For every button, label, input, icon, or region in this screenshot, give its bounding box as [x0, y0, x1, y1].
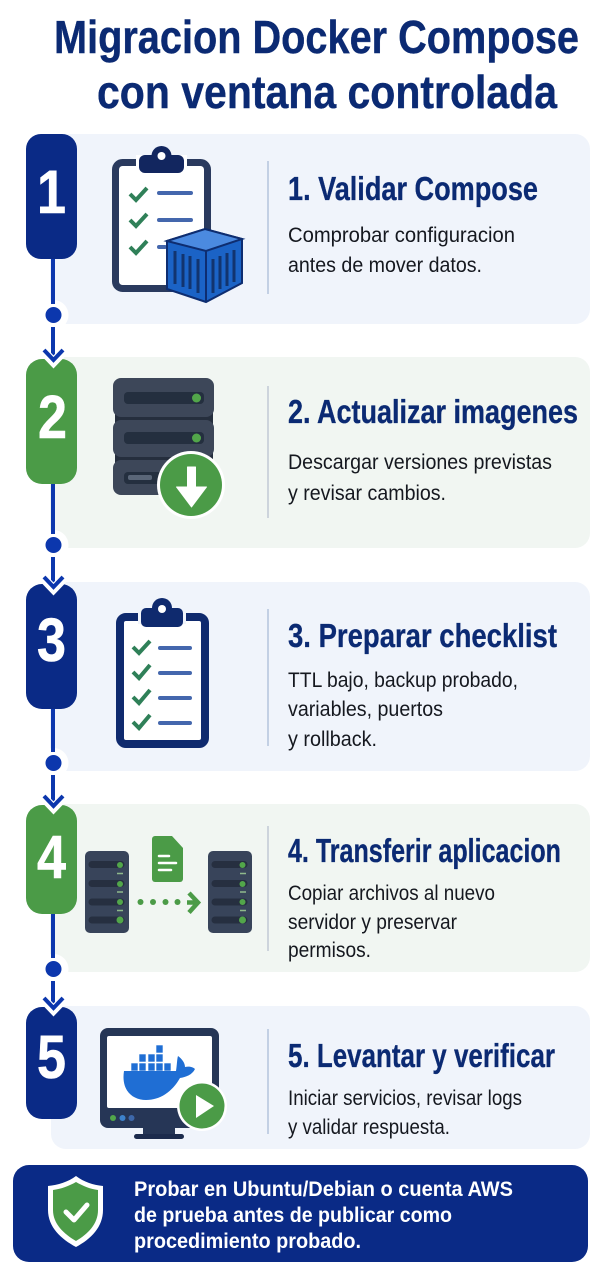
- description: Comprobar configuracion: [288, 223, 515, 247]
- description: [288, 1086, 522, 1139]
- badge: step 5: 5: [37, 1023, 66, 1091]
- icon: file transfer between servers: [85, 836, 252, 933]
- description: [288, 881, 495, 962]
- description: Copiar archivos al nuevo: [288, 881, 495, 905]
- badge: step 5: [26, 1007, 77, 1119]
- description: [288, 668, 518, 751]
- description: variables, puertos: [288, 697, 443, 721]
- badge: step 1: 1: [37, 158, 66, 226]
- panel: step 4: [50, 804, 590, 972]
- timeline connector: [38, 250, 68, 1009]
- arrowheads: [44, 350, 63, 1010]
- description: antes de mover datos.: [288, 253, 482, 277]
- heading: 1. Validar Compose: [288, 170, 538, 207]
- badge: step 3: [26, 584, 77, 709]
- callout: final note: [13, 1165, 588, 1262]
- description: y revisar cambios.: [288, 481, 446, 505]
- icon: monitor with docker whale: [100, 1028, 227, 1139]
- callout text: procedimiento probado.: [134, 1229, 361, 1253]
- badge: step 2: 2: [38, 383, 67, 451]
- description: TTL bajo, backup probado,: [288, 668, 518, 692]
- description: Descargar versiones previstas: [288, 450, 552, 474]
- title: con ventana controlada: [97, 66, 557, 118]
- icon: shield check: [48, 1176, 103, 1247]
- icon: clipboard with container: [116, 146, 242, 302]
- icon: server with download: [113, 378, 225, 519]
- panel: step 2: [50, 357, 590, 548]
- description: [288, 450, 552, 505]
- description: y validar respuesta.: [288, 1115, 450, 1139]
- panel: step 5: [51, 1006, 590, 1149]
- description: y rollback.: [288, 727, 377, 751]
- badge: step 4: [26, 805, 77, 914]
- callout text: Probar en Ubuntu/Debian o cuenta AWS: [134, 1177, 513, 1201]
- description: Iniciar servicios, revisar logs: [288, 1086, 522, 1110]
- description: permisos.: [288, 938, 371, 962]
- callout text: de prueba antes de publicar como: [134, 1203, 452, 1227]
- callout text: [134, 1177, 513, 1253]
- badge: step 2: [26, 359, 77, 484]
- panel: step 1: [50, 134, 590, 324]
- badge: step 1: [26, 134, 77, 259]
- panel: step 3: [50, 582, 590, 771]
- description: servidor y preservar: [288, 910, 457, 934]
- title: [54, 11, 579, 118]
- badge: step 3: 3: [37, 606, 66, 674]
- icon: checklist clipboard: [120, 598, 205, 744]
- badge: step 4: 4: [37, 823, 66, 891]
- description: [288, 223, 515, 277]
